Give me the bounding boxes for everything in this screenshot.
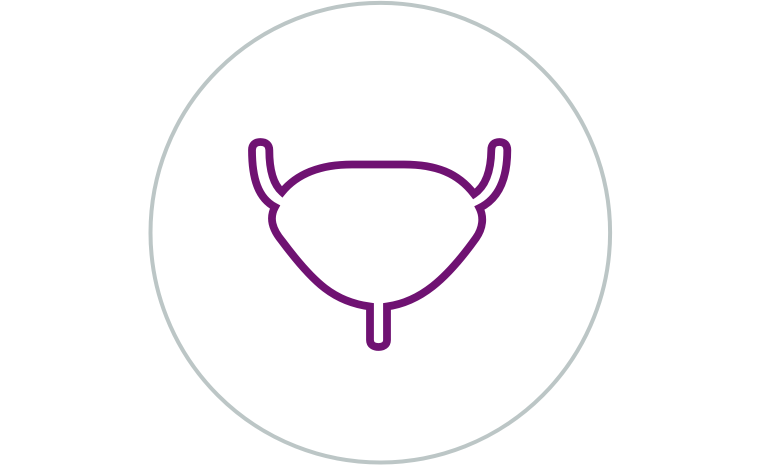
circle outline bbox=[150, 3, 610, 462]
icon: bladder bbox=[252, 142, 507, 347]
